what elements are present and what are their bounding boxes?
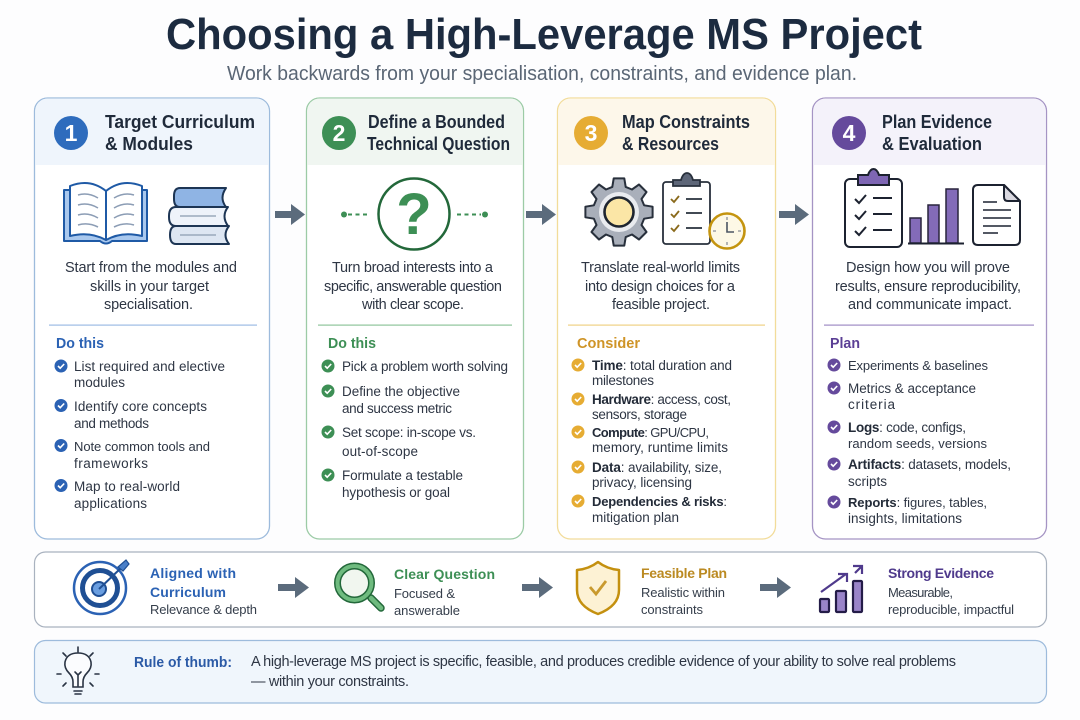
- step 4 description: results, ensure reproducibility,: [835, 279, 1021, 295]
- step 2 header band: [307, 98, 523, 165]
- step 4 checklist: Experiments & baselines: [848, 358, 988, 373]
- step 2 checklist: Formulate a testable: [342, 468, 463, 483]
- step 1 checklist: Map to real-world: [74, 479, 180, 494]
- icon: light bulb: [57, 647, 99, 694]
- step 2 checklist: Define the objective: [342, 384, 460, 399]
- outcome: feasible plan: [641, 565, 727, 617]
- outcome: feasible plan: Feasible Plan: [641, 565, 727, 581]
- icon: clipboard checklist: [845, 169, 902, 247]
- outcome: clear question: Clear Question: [394, 566, 495, 582]
- step 4 header band: [813, 98, 1046, 165]
- rule of thumb label: Rule of thumb:: [134, 655, 232, 671]
- step 4 checklist: [828, 358, 1011, 526]
- step 1 checklist: and methods: [74, 416, 149, 431]
- step 3 consider heading: Consider: [577, 336, 640, 352]
- arrow: step 2 to step 3: [526, 204, 556, 225]
- step 4 checklist: random seeds, versions: [848, 436, 988, 451]
- step 1 header band: [35, 98, 269, 165]
- outcome: feasible plan: constraints: [641, 602, 704, 617]
- step 2 description: [324, 260, 502, 313]
- outcome: strong evidence: reproducible, impactful: [888, 602, 1014, 617]
- rule of thumb text: — within your constraints.: [251, 674, 409, 690]
- step 3 number badge: 3: [585, 120, 597, 146]
- step 1 checklist: List required and elective: [74, 359, 225, 374]
- icon: magnifying glass: [338, 566, 381, 608]
- step 1 checklist: Note common tools and: [74, 439, 210, 454]
- arrow: step 3 to step 4: [779, 204, 809, 225]
- step 4 checklist: Artifacts: datasets, models,: [848, 457, 1011, 472]
- outcome: aligned with curriculum: Aligned with: [150, 565, 236, 581]
- step 1 number badge: [54, 116, 88, 150]
- icon: open book: [64, 183, 147, 244]
- step 2 checklist: Set scope: in-scope vs.: [342, 425, 476, 440]
- step 2 checklist: [322, 359, 508, 500]
- step 3 checklist: mitigation plan: [592, 510, 679, 525]
- step 3 number badge: [574, 116, 608, 150]
- step 2 heading: Define a Bounded: [368, 112, 505, 132]
- icon: bar chart: [908, 189, 964, 244]
- step 2 description: Turn broad interests into a: [332, 260, 494, 276]
- step 4 heading: & Evaluation: [882, 134, 982, 154]
- step 3 description: feasible project.: [612, 297, 710, 313]
- icon: question mark in circle: [341, 178, 488, 250]
- step 4 checklist: Reports: figures, tables,: [848, 495, 987, 510]
- step 1 checklist: [54, 359, 225, 511]
- panel: step 3 constraints: [558, 98, 776, 539]
- panel: step 4 evidence: [812, 98, 1046, 539]
- icon: shield with check: [577, 562, 619, 614]
- panel: rule of thumb: [34, 640, 1046, 703]
- icon: clock: [710, 214, 744, 248]
- icon: growth chart: [820, 566, 862, 612]
- step 4 plan heading: Plan: [830, 336, 860, 352]
- outcome: strong evidence: Strong Evidence: [888, 565, 994, 581]
- step 4 heading: [882, 112, 992, 154]
- step 1 heading: & Modules: [105, 134, 193, 154]
- step 1 description: [65, 260, 237, 313]
- step 2 checklist: and success metric: [342, 401, 452, 416]
- step 2 description: with clear scope.: [361, 297, 464, 313]
- step 4 checklist: scripts: [848, 474, 887, 489]
- arrow: outcome 1 to 2: [278, 577, 309, 598]
- icon: gear: [585, 178, 653, 246]
- title: Choosing a High-Leverage MS Project: [166, 10, 922, 59]
- step 4 checklist: insights, limitations: [848, 511, 962, 526]
- step 4 checklist: Logs: code, configs,: [848, 420, 966, 435]
- step 1 heading: [105, 112, 255, 154]
- step 1 checklist: modules: [74, 375, 125, 390]
- step 1 number badge: 1: [65, 120, 78, 146]
- step 1 checklist: applications: [74, 496, 147, 511]
- rule of thumb text: [251, 654, 956, 690]
- step 3 heading: Map Constraints: [622, 112, 750, 132]
- step 3 description: into design choices for a: [585, 279, 736, 295]
- panel: step 2 bounded question: [306, 98, 524, 539]
- icon: clipboard checklist: [663, 173, 710, 244]
- step 4 checklist: criteria: [848, 397, 895, 412]
- step 1 checklist: Identify core concepts: [74, 399, 207, 414]
- subtitle: Work backwards from your specialisation, constraints, and evidence plan.: [227, 63, 857, 85]
- outcome: clear question: Focused &: [394, 586, 455, 601]
- step 2 heading: Technical Question: [367, 134, 510, 154]
- icon: document: [973, 185, 1020, 245]
- step 2 number badge: 2: [333, 120, 345, 146]
- step 4 checklist: Metrics & acceptance: [848, 381, 976, 396]
- step 4 description: [835, 260, 1021, 313]
- step 1 do-this heading: Do this: [56, 336, 104, 352]
- outcome: aligned with curriculum: Curriculum: [150, 584, 226, 600]
- step 2 heading: [367, 112, 510, 154]
- step 1 description: skills in your target: [90, 279, 209, 295]
- outcome: aligned with curriculum: Relevance & depth: [150, 602, 257, 617]
- panel: step 1 target curriculum: [34, 98, 270, 539]
- panel: outcomes strip: [34, 552, 1046, 627]
- step 3 checklist: Hardware: access, cost,: [592, 392, 731, 407]
- step 3 checklist: Time: total duration and: [592, 358, 732, 373]
- step 3 heading: [622, 112, 750, 154]
- rule of thumb text: A high-leverage MS project is specific, feasible, and produces credible evidence of your ability to solve real problems: [251, 654, 956, 670]
- step 4 heading: Plan Evidence: [882, 112, 992, 132]
- step 2 description: specific, answerable question: [324, 279, 502, 295]
- step 2 checklist: Pick a problem worth solving: [342, 359, 508, 374]
- step 3 checklist: Data: availability, size,: [592, 460, 722, 475]
- icon: question mark in circle: ?: [396, 182, 432, 247]
- step 3 checklist: Compute: GPU/CPU,: [592, 425, 709, 440]
- outcome: clear question: [394, 566, 495, 618]
- step 3 checklist: sensors, storage: [592, 407, 687, 422]
- step 3 description: [581, 260, 740, 313]
- outcome: feasible plan: Realistic within: [641, 585, 725, 600]
- step 2 do-this heading: Do this: [328, 336, 376, 352]
- step 3 heading: & Resources: [622, 134, 719, 154]
- step 1 description: Start from the modules and: [65, 260, 237, 276]
- arrow: outcome 3 to 4: [760, 577, 791, 598]
- step 1 checklist: frameworks: [74, 456, 148, 471]
- step 4 description: Design how you will prove: [846, 260, 1010, 276]
- step 4 number badge: [832, 116, 866, 150]
- arrow: outcome 2 to 3: [522, 577, 553, 598]
- icon: stack of books: [169, 188, 229, 244]
- step 2 checklist: out-of-scope: [342, 444, 418, 459]
- step 4 number badge: 4: [843, 120, 856, 146]
- outcome: strong evidence: Measurable,: [888, 585, 953, 600]
- arrow: step 1 to step 2: [275, 204, 305, 225]
- step 1 description: specialisation.: [104, 297, 193, 313]
- step 3 header band: [558, 98, 775, 165]
- icon: target: [74, 560, 129, 614]
- outcome: strong evidence: [888, 565, 1014, 617]
- step 1 heading: Target Curriculum: [105, 112, 255, 132]
- step 3 checklist: milestones: [592, 373, 654, 388]
- outcome: clear question: answerable: [394, 603, 460, 618]
- step 3 checklist: Dependencies & risks:: [592, 494, 727, 509]
- step 2 number badge: [322, 116, 356, 150]
- step 2 checklist: hypothesis or goal: [342, 485, 450, 500]
- step 3 checklist: privacy, licensing: [592, 475, 692, 490]
- step 4 description: and communicate impact.: [848, 297, 1012, 313]
- outcome: aligned with curriculum: [150, 565, 257, 617]
- step 3 checklist: memory, runtime limits: [592, 440, 728, 455]
- step 3 checklist: [572, 358, 732, 525]
- step 3 description: Translate real-world limits: [581, 260, 740, 276]
